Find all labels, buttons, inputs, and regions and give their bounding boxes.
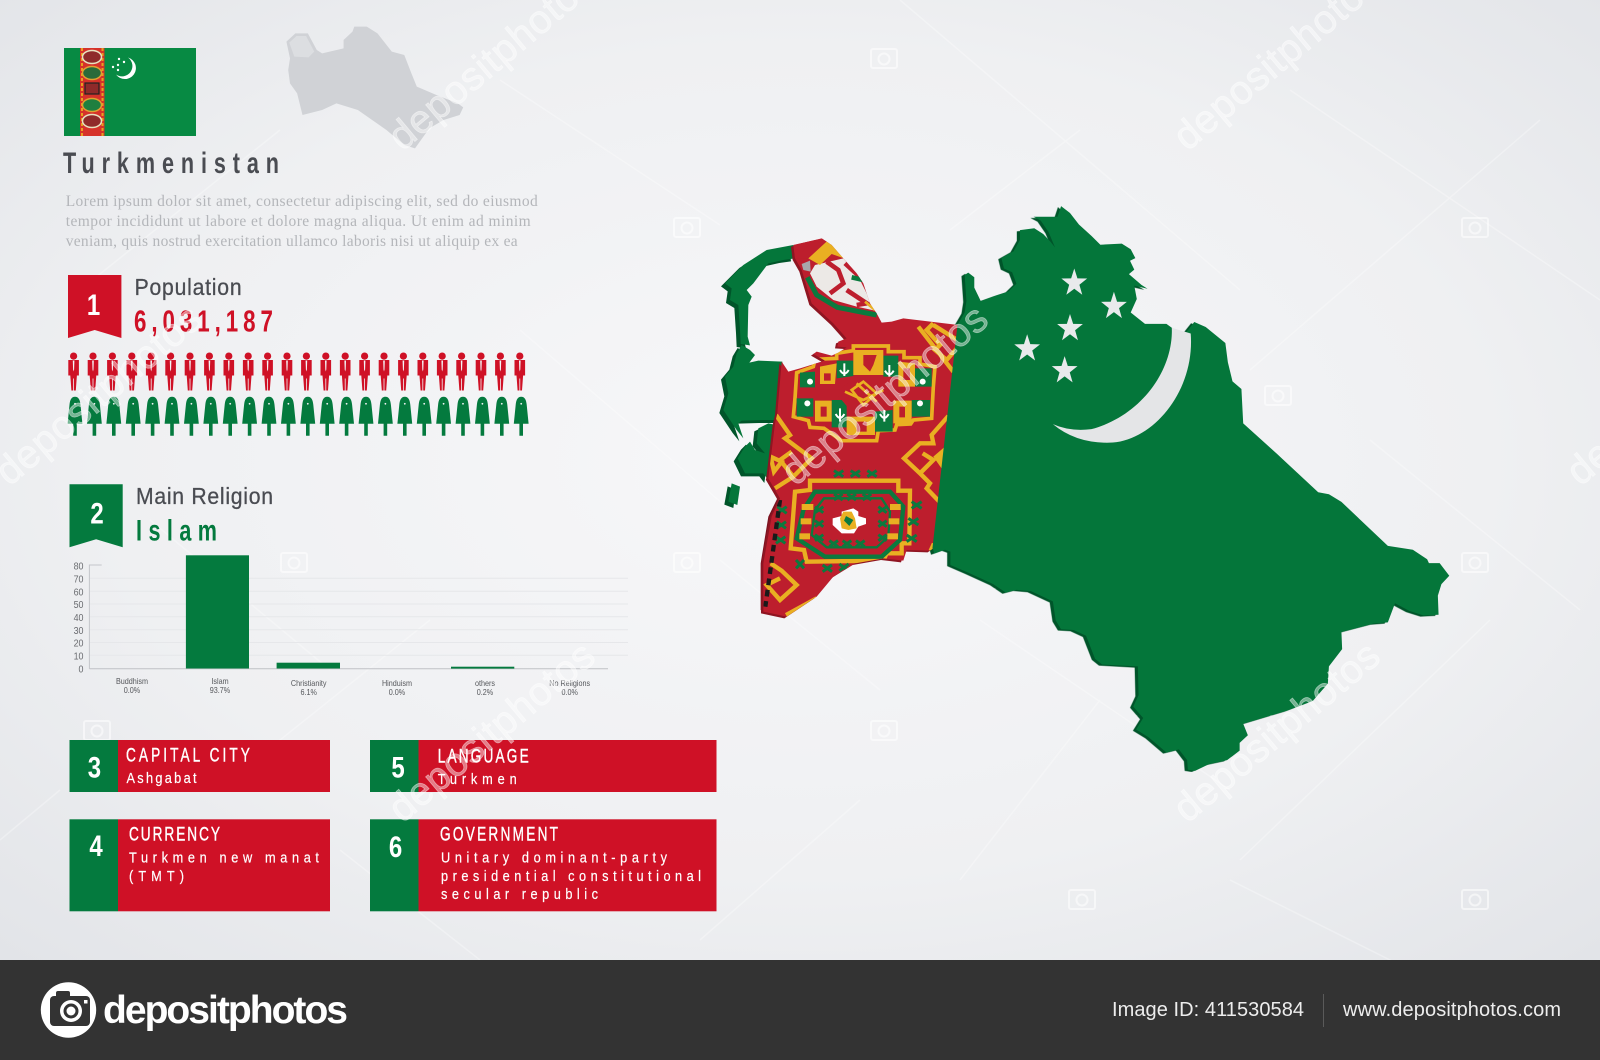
y axis: 60 [74,587,84,599]
category labels: 93.7% [210,685,230,695]
bar chart: religions [74,555,628,697]
y axis: 20 [74,638,84,650]
card 4: currency: CURRENCY [129,823,220,845]
card 4: currency: (TMT) [129,867,184,884]
watermark text: depositphotos [380,633,603,831]
yellow chain motifs [767,323,958,615]
category labels: Islam [211,676,229,686]
card 5: language: LANGUAGE [438,745,529,767]
card 6: government [370,819,716,911]
card 3: capital city [70,740,330,792]
badge 2 [70,484,123,547]
flag of Turkmenistan [64,48,196,136]
y axis: 50 [74,600,84,611]
category labels: 0.0% [124,685,140,695]
title: Turkmenistan [63,145,279,180]
category labels: Buddhism [116,676,148,686]
pictogram: female row [68,397,529,436]
3D flag map of Turkmenistan [719,206,1449,772]
religion label: Main Religion [136,483,273,509]
card 6: government: 6 [389,829,402,864]
card 6: government: Unitary dominant-party [441,849,667,866]
y axis: 0 [79,664,84,676]
category labels: 6.1% [300,687,317,697]
footer website: www.depositphotos.com [1342,999,1561,1021]
footer image id: Image ID: 411530584 [1112,999,1304,1021]
map west: carpet band and Caspian coast [719,238,958,618]
category labels: 0.2% [477,687,493,697]
footer brand name: depositphotos [103,989,348,1032]
card 3: capital city: CAPITAL CITY [126,744,250,766]
lower gul [776,471,922,572]
section 1: population [68,274,529,436]
population label: Population [135,274,242,300]
flag stars [112,58,125,71]
watermark camera icons [84,49,1488,909]
category labels [116,676,590,697]
y axis: 80 [74,561,84,573]
card 5: language: 5 [391,750,405,784]
category labels: 0.0% [561,687,578,697]
population value: 6,031,187 [134,304,273,338]
y axis: 10 [74,651,84,663]
watermark text [0,0,1600,831]
carpet motifs [765,238,958,615]
watermark text: depositphotos [773,296,996,494]
badge 2: 2 [90,496,104,530]
card 4: currency: Turkmen new manat [129,849,319,866]
bars [186,555,514,669]
footer bar [0,960,1600,1060]
map east: extruded side [929,207,1446,772]
y axis: 30 [74,625,84,637]
y axis [74,561,102,676]
footer logo icon [41,982,96,1038]
intro paragraph: tempor incididunt ut labore et dolore magna aliqua. Ut enim ad minim [66,213,531,230]
watermark text: depositphotos [1165,633,1388,831]
intro paragraph [66,193,538,250]
intro paragraph: Lorem ipsum dolor sit amet, consectetur adipiscing elit, sed do eiusmod [66,193,538,210]
category labels: No Religions [549,678,590,688]
card 6: government: GOVERNMENT [440,823,558,845]
y axis: 40 [74,612,84,624]
card 6: government: secular republic [441,885,598,902]
x axis [89,668,608,670]
y axis: 70 [74,574,84,586]
card 4: currency [70,819,330,911]
category labels: Christianity [291,678,327,688]
section 2: main religion [70,483,273,548]
card 3: capital city: Ashgabat [126,769,197,786]
flag carpet band [80,48,104,136]
flag crescent [116,58,136,79]
card 6: government: presidential constitutional [441,867,701,884]
horn motif [793,238,877,315]
card 5: language: Turkmen [438,770,517,787]
card 5: language [370,740,716,792]
card 4: currency: 4 [89,828,103,863]
category labels: others [475,678,495,688]
map east: green field [932,206,1449,771]
category labels: 0.0% [389,687,405,697]
religion value: Islam [136,513,217,548]
map stars [1014,268,1127,382]
black edge stripes [765,500,780,607]
pictogram: male row [68,352,525,390]
badge 1 [68,275,121,338]
card 3: capital city: 3 [88,750,101,784]
badge 1: 1 [87,287,100,322]
upper gul [793,346,935,441]
intro paragraph: veniam, quis nostrud exercitation ullamco laboris nisi ut aliquip ex ea [66,233,518,250]
map crescent [1053,328,1191,443]
small grey map silhouette [286,27,463,148]
category labels: Hinduism [382,678,412,688]
